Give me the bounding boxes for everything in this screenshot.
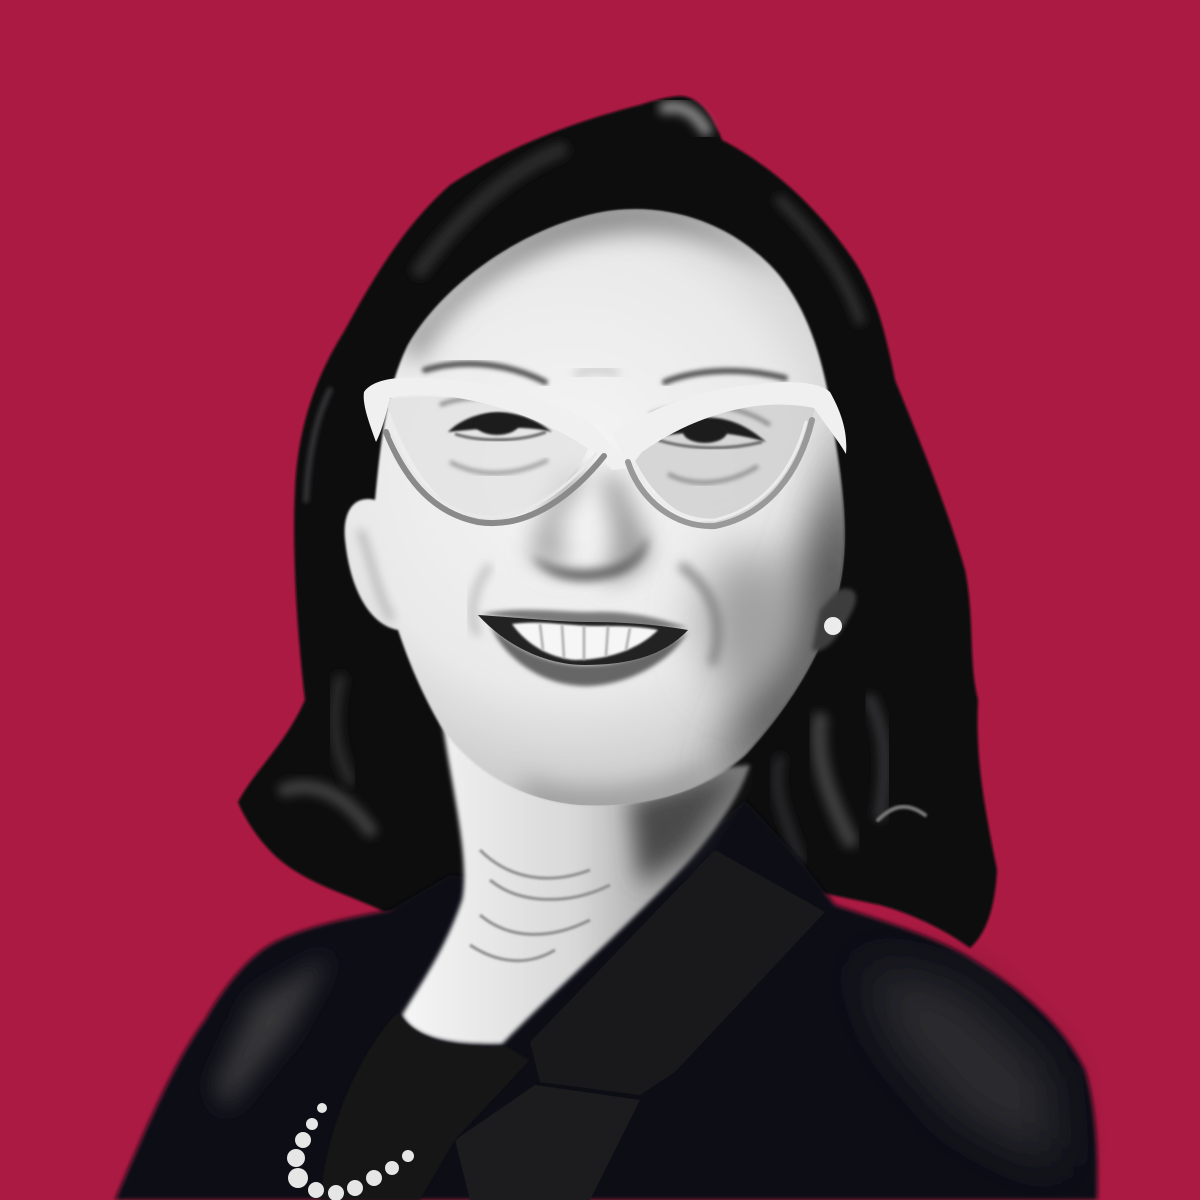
mouth bbox=[478, 610, 688, 686]
hair highlights bbox=[285, 107, 925, 860]
top hairline shadow bbox=[400, 200, 790, 360]
lower lip bbox=[490, 625, 688, 686]
eyebrows bbox=[425, 364, 785, 382]
portrait illustration bbox=[112, 94, 1101, 1200]
right lapel bbox=[530, 850, 825, 1095]
left frame lower bbox=[386, 432, 604, 523]
right ear bbox=[812, 589, 856, 651]
tooth gaps bbox=[540, 624, 630, 660]
lens tint right bbox=[630, 405, 815, 524]
nose bbox=[530, 470, 648, 581]
jacket shoulder highlight left bbox=[215, 955, 330, 1110]
eyes bbox=[385, 396, 815, 524]
glasses bbox=[364, 378, 846, 526]
eye left bbox=[448, 412, 552, 432]
cheek shading bbox=[700, 550, 800, 690]
necklace bbox=[287, 1103, 414, 1200]
right frame lower bbox=[628, 420, 812, 526]
earring bbox=[824, 617, 842, 635]
jacket bbox=[115, 800, 1097, 1200]
smile line right bbox=[680, 565, 717, 665]
ear inner bbox=[360, 530, 392, 620]
lens tint left bbox=[385, 396, 590, 522]
mouth opening bbox=[478, 615, 688, 665]
chin shading bbox=[514, 760, 707, 806]
jacket shoulder highlight right bbox=[860, 960, 1060, 1170]
eye right bbox=[652, 417, 766, 442]
neck wrinkles bbox=[470, 850, 610, 961]
neck bbox=[402, 720, 750, 1044]
left frame top bbox=[364, 378, 632, 470]
neck shadow bbox=[630, 770, 740, 885]
face right shadow bbox=[710, 420, 870, 790]
dark top bbox=[320, 1012, 530, 1200]
forehead crease bbox=[575, 370, 618, 375]
teeth bbox=[512, 623, 658, 660]
right frame top bbox=[612, 382, 846, 470]
upper lip bbox=[480, 610, 688, 628]
lower lapel bbox=[455, 1085, 640, 1200]
smile line left bbox=[473, 565, 490, 635]
hair bbox=[238, 96, 997, 948]
face bbox=[345, 200, 870, 825]
